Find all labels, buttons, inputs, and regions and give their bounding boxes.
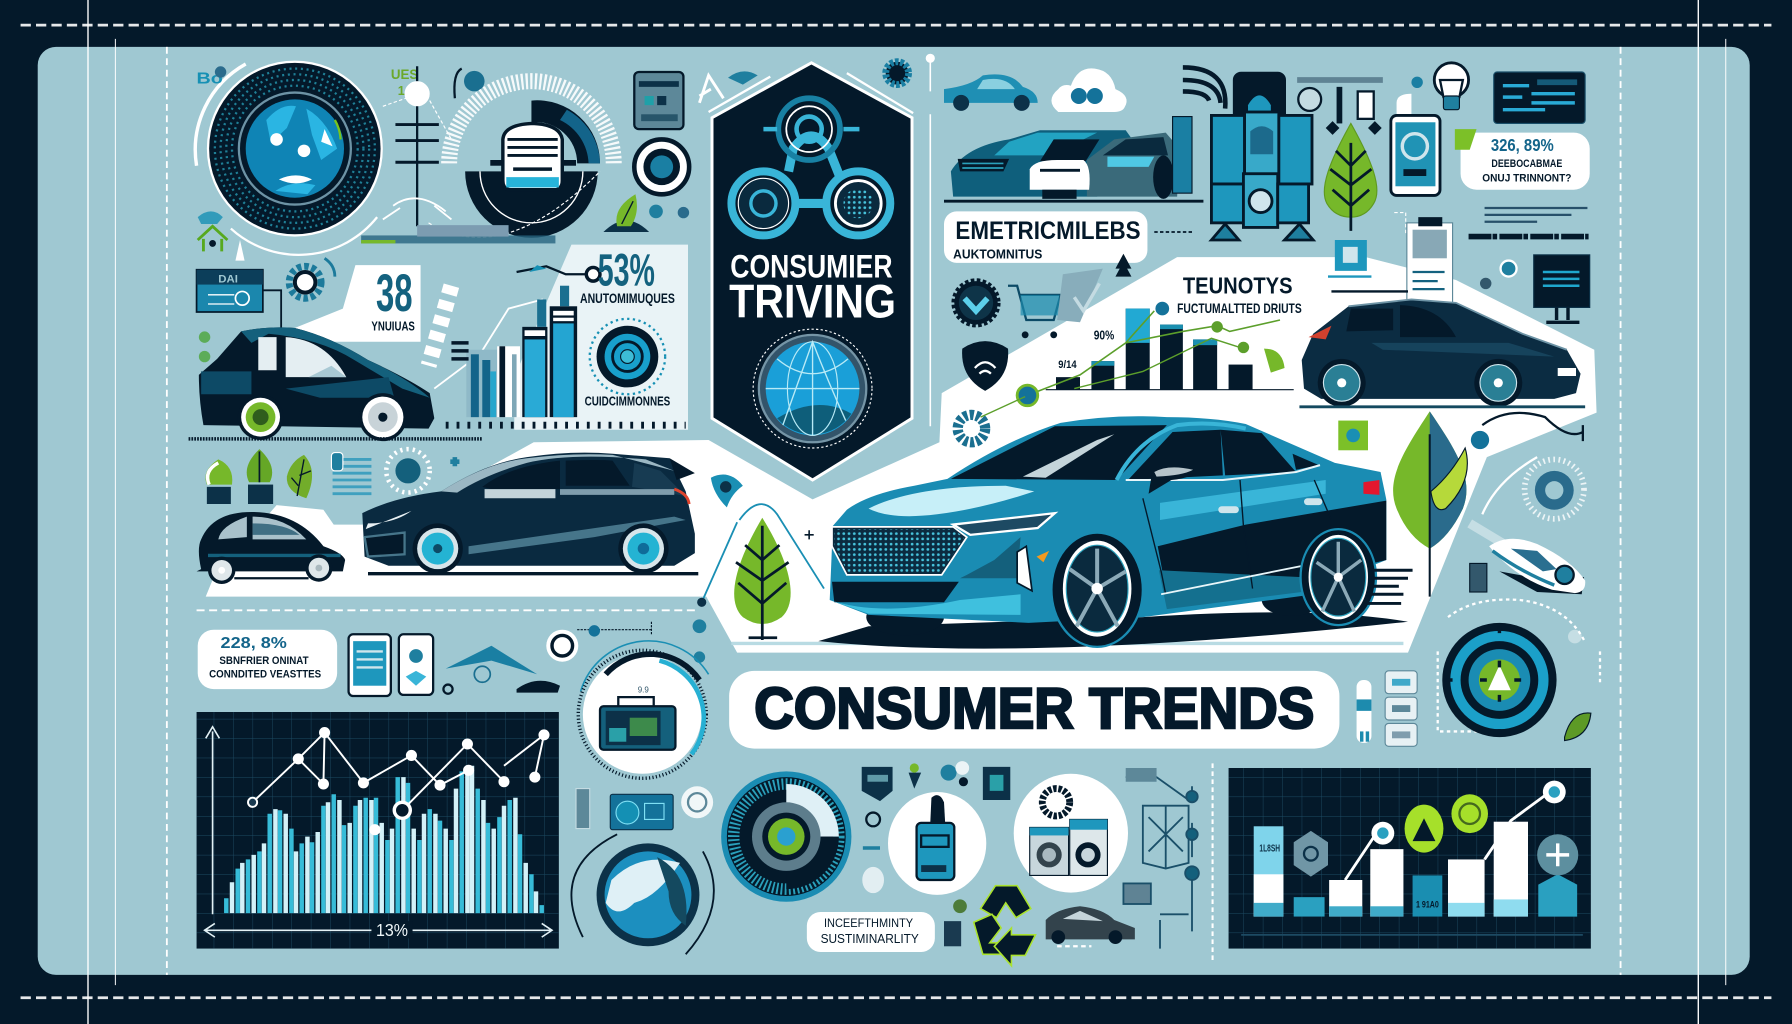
icon: data box and gear — [197, 258, 335, 362]
sustainability label: INCEEFTHMINTY — [824, 916, 913, 930]
callout: emetric miles: EMETRICMILEBS — [955, 217, 1141, 245]
line series — [248, 728, 549, 834]
car: small city car — [197, 512, 345, 584]
small icons: phone card — [576, 786, 713, 830]
icon: device dial — [578, 641, 709, 778]
chart icons — [1294, 781, 1578, 877]
callout: 228 percent — [198, 630, 337, 689]
sustainability label: SUSTIMINARLITY — [821, 931, 919, 946]
icon: connected modules — [1211, 73, 1313, 240]
callout: 326 percent: DEEBOCABMAE — [1491, 158, 1562, 170]
car: black SUV centre left — [362, 453, 698, 574]
callout: 38: YNUIUAS — [371, 319, 415, 333]
small pictograms row — [1297, 77, 1423, 123]
icon: white car angled — [1470, 523, 1585, 594]
callout: 326 percent — [1455, 129, 1590, 190]
green small labels: 1o — [398, 84, 413, 98]
bars — [1254, 822, 1577, 917]
small pictograms mid bottom — [862, 761, 1010, 894]
icon: battery and report — [1331, 217, 1453, 326]
icon: data box and gear: DAI — [218, 273, 238, 285]
bar chart right — [1229, 768, 1591, 949]
trend chart with heading: TEUNOTYS — [1183, 273, 1293, 299]
icon: monitor — [1480, 255, 1590, 322]
icon: target badge — [1438, 600, 1600, 741]
callout: 228 percent: CONNDITED VEASTTES — [209, 669, 321, 681]
list icon and dial — [331, 449, 459, 494]
icon: wifi waves — [1183, 67, 1225, 109]
icon: dial right — [1482, 457, 1584, 519]
callout: 53 percent panel: ANUTOMIMUQUES — [580, 291, 675, 307]
icon: lightbulb — [1434, 63, 1469, 110]
bar chart right: 1L8SH — [1259, 843, 1280, 854]
line and bar chart left: 13% — [376, 920, 408, 940]
callout: 38: 38 — [376, 264, 413, 323]
icon cluster: small top-left marks — [197, 66, 245, 261]
white area behind cars — [206, 257, 1597, 653]
globe dial top left — [195, 61, 383, 255]
title pill: CONSUMER TRENDS — [754, 677, 1314, 741]
badge title: TRIVING — [729, 276, 896, 328]
icon: right leaf and small tags — [1338, 411, 1583, 597]
hexagon badge — [699, 56, 921, 489]
icon: badge globe — [753, 329, 872, 448]
trend chart with heading: 90% — [1094, 328, 1114, 342]
plant pots — [205, 449, 312, 504]
callout: 53 percent panel: CUIDCIMMONNES — [585, 395, 670, 409]
trend chart with heading: 9/14 — [1058, 359, 1077, 371]
callout: 326 percent: ONUJ TRINNONT? — [1482, 173, 1571, 185]
icon: device dial: 9.9 — [638, 686, 649, 695]
icon: person badge — [888, 792, 986, 895]
icons: heart shield cart wifi — [954, 254, 1131, 391]
car: small blue car — [944, 74, 1038, 111]
right-of-badge decorations — [926, 54, 935, 426]
icon: dashboard tablet — [634, 72, 683, 129]
stripe strip — [361, 225, 555, 243]
icon: smartphone — [1391, 115, 1440, 195]
sustainability label — [807, 912, 935, 952]
icon: slider and buttons — [1357, 671, 1417, 746]
icon: leaf on rock — [603, 194, 689, 232]
icon: washing machines — [1014, 774, 1128, 893]
callout: 53 percent panel — [514, 245, 688, 430]
callout: 326 percent: 326, 89% — [1491, 135, 1554, 155]
big round data gauge — [721, 771, 851, 902]
icon: earth globe — [571, 834, 714, 954]
callout: emetric miles: AUKTOMNITUS — [953, 247, 1042, 261]
icons: tablets and glider — [349, 619, 706, 696]
car: small dark silhouette — [944, 899, 1135, 946]
badge title: CONSUMIER — [730, 249, 893, 285]
green small labels — [391, 67, 418, 98]
callout: 38 — [261, 264, 451, 366]
skyline bar chart — [434, 286, 686, 425]
icon: big green leaf — [1324, 121, 1382, 231]
bar chart right: 1 91A0 — [1416, 899, 1439, 909]
green small labels: UES — [391, 67, 418, 82]
callout: 53 percent panel: 53% — [598, 245, 655, 296]
trend chart with heading: FUCTUMALTTED DRIUTS — [1177, 301, 1302, 317]
gauge with bus icon — [429, 81, 614, 238]
callout: emetric miles — [944, 211, 1193, 263]
car: black hatchback right — [1299, 299, 1585, 407]
car: hero blue sedan — [818, 416, 1413, 649]
icon: ring target — [634, 139, 689, 194]
line and bar chart left — [197, 712, 559, 949]
data strips right — [1394, 208, 1589, 237]
icon: cloud — [1051, 68, 1127, 112]
icon: connected network — [731, 98, 890, 235]
trend chart with heading — [958, 273, 1302, 442]
cars row — [944, 117, 1203, 201]
car: dark hatchback left — [189, 327, 482, 441]
icon: pipes and tower — [1123, 763, 1213, 960]
icon: recycle symbol — [974, 886, 1035, 966]
icon: dashboard screen — [1494, 72, 1585, 123]
callout: 228 percent: 228, 8% — [221, 635, 287, 652]
icon: transmission tower — [383, 66, 485, 226]
bars — [226, 766, 542, 913]
icon cluster: small top-left marks: Bo — [197, 70, 223, 87]
icon: document tile — [1328, 240, 1371, 277]
icon: leaf with stem — [697, 475, 824, 640]
callout: 228 percent: SBNFRIER ONINAT — [219, 655, 309, 667]
badge title — [729, 249, 896, 328]
